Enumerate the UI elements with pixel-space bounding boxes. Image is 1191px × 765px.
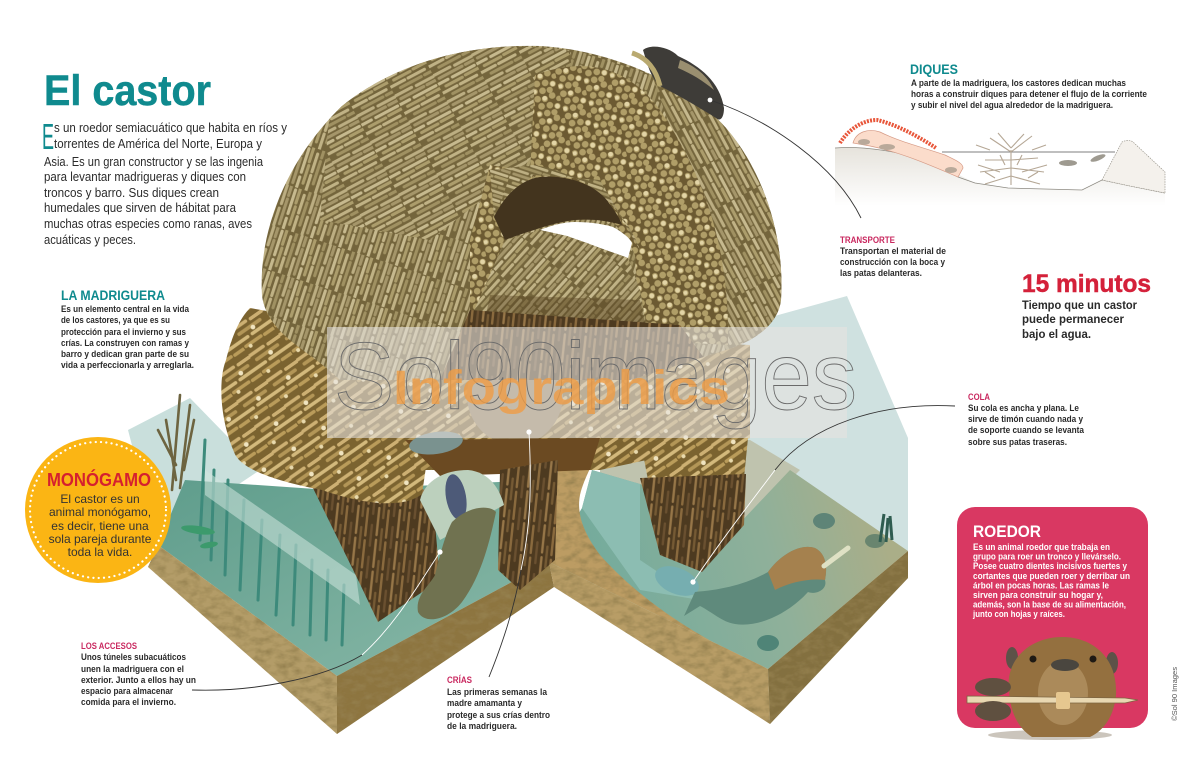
- watermark orange text: Infographics: [393, 362, 730, 415]
- text block: la madriguera: Es un elemento central en la vida: [61, 304, 190, 315]
- figure: 15 minutos: [1022, 270, 1151, 298]
- back wall of right block: [600, 440, 800, 530]
- badge: monógamo: El castor es un: [60, 492, 140, 506]
- muzzle: [1038, 661, 1088, 725]
- carried branch: [632, 53, 660, 86]
- yellow circle: [25, 437, 171, 583]
- text block: diques: horas a construir diques para detener el flujo de la corriente: [911, 89, 1147, 100]
- badge: monógamo: [25, 437, 171, 583]
- branch: [824, 548, 848, 566]
- ground shading: [835, 148, 1165, 206]
- teeth: [1056, 692, 1070, 709]
- intro paragraph: para levantar madrigueras y diques con: [44, 169, 246, 184]
- watermark band: [327, 327, 847, 438]
- stat: 15 minutos: Tiempo que un castor: [1022, 298, 1137, 312]
- central soil ridge: [549, 438, 768, 669]
- label: COLA: [968, 392, 990, 402]
- badge: monógamo: toda la vida.: [68, 545, 132, 559]
- nose: [1051, 659, 1079, 671]
- soil right-front face: [549, 562, 770, 724]
- text block: la madriguera: de los castores, ya que es su: [61, 315, 170, 326]
- panel: roedor: [957, 507, 1148, 740]
- intro paragraph: [42, 116, 287, 247]
- heading: DIQUES: [910, 62, 958, 77]
- dome top left sticks: [320, 47, 575, 240]
- stick column top: [640, 438, 748, 480]
- white opening: [540, 222, 632, 258]
- badge: monógamo: es decir, tiene una: [51, 519, 149, 533]
- central stick column: [498, 460, 558, 590]
- panel body: cortantes que pueden roer y derribar un: [973, 571, 1130, 582]
- intro paragraph: humedales que sirven de hábitat para: [44, 200, 237, 215]
- panel body: sirven para construir su hogar y,: [973, 590, 1103, 601]
- dark cavity: [494, 177, 622, 240]
- text block: crías: madre amamanta y: [447, 698, 523, 709]
- text block: cola: de soporte cuando se levanta: [968, 425, 1085, 436]
- water line: [942, 151, 1115, 153]
- illustration: beaver portrait: [967, 637, 1138, 740]
- stat: 15 minutos: puede permanecer: [1022, 312, 1124, 326]
- text block: la madriguera: protección para el invierno y sus: [61, 327, 186, 338]
- text block: diques: y subir el nivel del agua alrededor de la madriguera.: [911, 100, 1113, 111]
- illustration: cutaway block with water and soil: [128, 296, 908, 734]
- lower wall dark sticks: [440, 310, 720, 380]
- text block: crías: Las primeras semanas la: [447, 687, 548, 698]
- tail on top: [408, 428, 464, 458]
- text block: los accesos: comida para el invierno.: [81, 697, 176, 708]
- dark stick wall: [310, 482, 440, 622]
- branch in mouth: [967, 696, 1138, 703]
- reeds: [158, 395, 344, 645]
- label: CRÍAS: [447, 675, 472, 685]
- fish: [181, 524, 218, 550]
- text block: la madriguera: vida a perfeccionarla y arreglarla.: [61, 360, 194, 371]
- dome right rim sticks: [652, 74, 782, 350]
- stippled mound: [1102, 140, 1165, 193]
- soil left front face: [148, 545, 337, 734]
- pale glass water, left block: [128, 398, 260, 545]
- panel body: junto con hojas y raíces.: [972, 609, 1065, 620]
- panel body: además, son la base de su alimentación,: [973, 600, 1126, 610]
- panel body: Posee cuatro dientes incisivos fuertes y: [973, 561, 1128, 572]
- text block: los accesos: unen la madriguera con el: [81, 664, 184, 675]
- paws: [975, 678, 1011, 696]
- text block: diques: [910, 62, 1147, 111]
- intro paragraph: s un roedor semiacuático que habita en ríos y: [54, 120, 287, 135]
- badge: monógamo: animal monógamo,: [49, 505, 151, 519]
- nest: [405, 438, 600, 476]
- dotted ring: [30, 442, 166, 578]
- panel body: grupo para roer un tronco y llevárselo.: [973, 552, 1121, 562]
- badge heading: MONÓGAMO: [47, 469, 151, 490]
- callout line: transporte: [708, 98, 861, 218]
- dome cut ends: [530, 66, 728, 345]
- text block: cola: [968, 392, 1085, 448]
- pale glass water, right block: [640, 296, 908, 560]
- upper stick mass: [221, 308, 430, 503]
- badge: monógamo: sola pareja durante: [49, 532, 152, 546]
- text block: la madriguera: crías. La construyen con ramas y: [61, 338, 190, 349]
- ears: [1006, 647, 1018, 669]
- label: TRANSPORTE: [840, 235, 895, 245]
- text block: la madriguera: [61, 288, 194, 371]
- intro paragraph: acuáticas y peces.: [44, 232, 136, 247]
- dome base sticks: [250, 40, 790, 385]
- watermark outline text: Sol90images: [334, 323, 857, 430]
- body: [418, 508, 496, 619]
- footer: image credit: ©Sol 90 Images: [1171, 666, 1179, 721]
- panel heading: ROEDOR: [973, 522, 1041, 541]
- text block: la madriguera: barro y dedican gran parte de su: [61, 349, 189, 360]
- arch top sticks: [490, 165, 640, 250]
- callout line: cola: [690, 406, 955, 585]
- lower mound: [221, 308, 750, 622]
- soil middle face: [337, 562, 554, 734]
- intro paragraph: E: [42, 116, 54, 157]
- intro paragraph: torrentes de América del Norte, Europa y: [54, 136, 262, 151]
- stick column bottom: [640, 474, 746, 572]
- text block: cola: sirve de timón cuando nada y: [968, 414, 1084, 425]
- eyes: [1030, 656, 1036, 662]
- text block: diques: A parte de la madriguera, los castores dedican muchas: [911, 78, 1126, 89]
- title: El castor: [44, 67, 211, 115]
- panel body: Es un animal roedor que trabaja en: [973, 542, 1110, 553]
- left block floor: [158, 480, 549, 676]
- text block: cola: sobre sus patas traseras.: [968, 437, 1067, 448]
- stat: 15 minutos: [1022, 270, 1151, 341]
- label: LOS ACCESOS: [81, 641, 137, 651]
- panel background: [957, 507, 1148, 728]
- beaver on top of the dome: [632, 47, 724, 120]
- beaver diving: [408, 428, 496, 619]
- soil right face: [768, 551, 908, 724]
- callout line: crías: [489, 429, 532, 677]
- ledge under the opening: [474, 230, 646, 322]
- back fur: [678, 60, 714, 90]
- panel body: [972, 542, 1130, 620]
- right stick column: [640, 438, 748, 572]
- text block: transporte: las patas delanteras.: [840, 268, 922, 279]
- intro paragraph: Asia. Es un gran constructor y se las ingenia: [44, 154, 264, 169]
- photo agency watermark: [327, 323, 857, 438]
- text block: crías: protege a sus crías dentro: [447, 710, 550, 721]
- callout line: los accesos: [192, 549, 443, 690]
- diagram: dam cross section: [835, 120, 1165, 206]
- stones: [858, 139, 957, 173]
- cast shadow: [988, 730, 1112, 740]
- upper mass, interior: [330, 322, 750, 470]
- panel body: árbol en pocas horas. Las ramas le: [973, 580, 1109, 592]
- head: [1009, 637, 1116, 737]
- text block: transporte: Transportan el material de: [840, 246, 946, 257]
- text block: crías: [447, 675, 550, 732]
- heading: LA MADRIGUERA: [61, 288, 165, 303]
- text block: transporte: [840, 235, 946, 279]
- text block: cola: Su cola es ancha y plana. Le: [968, 403, 1079, 414]
- stat: 15 minutos: bajo el agua.: [1022, 327, 1091, 341]
- beaver swimming: [651, 547, 848, 625]
- rocks and grass: [757, 513, 892, 651]
- intro paragraph: troncos y barro. Sus diques crean: [44, 185, 219, 200]
- tunnel opening: [442, 473, 470, 521]
- intro paragraph: muchas otras especies como ranas, aves: [44, 216, 252, 231]
- mother beaver: [467, 345, 563, 445]
- fish: [1059, 153, 1106, 166]
- illustration: dome of the lodge: [250, 40, 800, 385]
- head and back fur: [768, 547, 826, 590]
- text block: los accesos: exterior. Junto a ellos hay un: [81, 675, 196, 686]
- text block: crías: de la madriguera.: [447, 721, 517, 732]
- text block: transporte: construcción con la boca y: [840, 257, 946, 268]
- tunnel: [420, 470, 504, 540]
- right block floor: [549, 470, 908, 669]
- body: [684, 547, 826, 625]
- text block: los accesos: [81, 641, 196, 708]
- beaver body: [643, 47, 724, 120]
- dam mound, pink: [853, 130, 963, 177]
- text block: los accesos: Unos túneles subacuáticos: [81, 652, 186, 663]
- water, right block: [582, 470, 700, 600]
- dam top, orange sticks: [840, 120, 936, 148]
- dome lower left cut: [470, 165, 533, 310]
- text block: los accesos: espacio para almacenar: [81, 686, 173, 697]
- tree in water: [976, 133, 1047, 185]
- ground line: [835, 148, 1165, 193]
- tail: [651, 560, 703, 602]
- glass plate with reeds: [205, 470, 360, 605]
